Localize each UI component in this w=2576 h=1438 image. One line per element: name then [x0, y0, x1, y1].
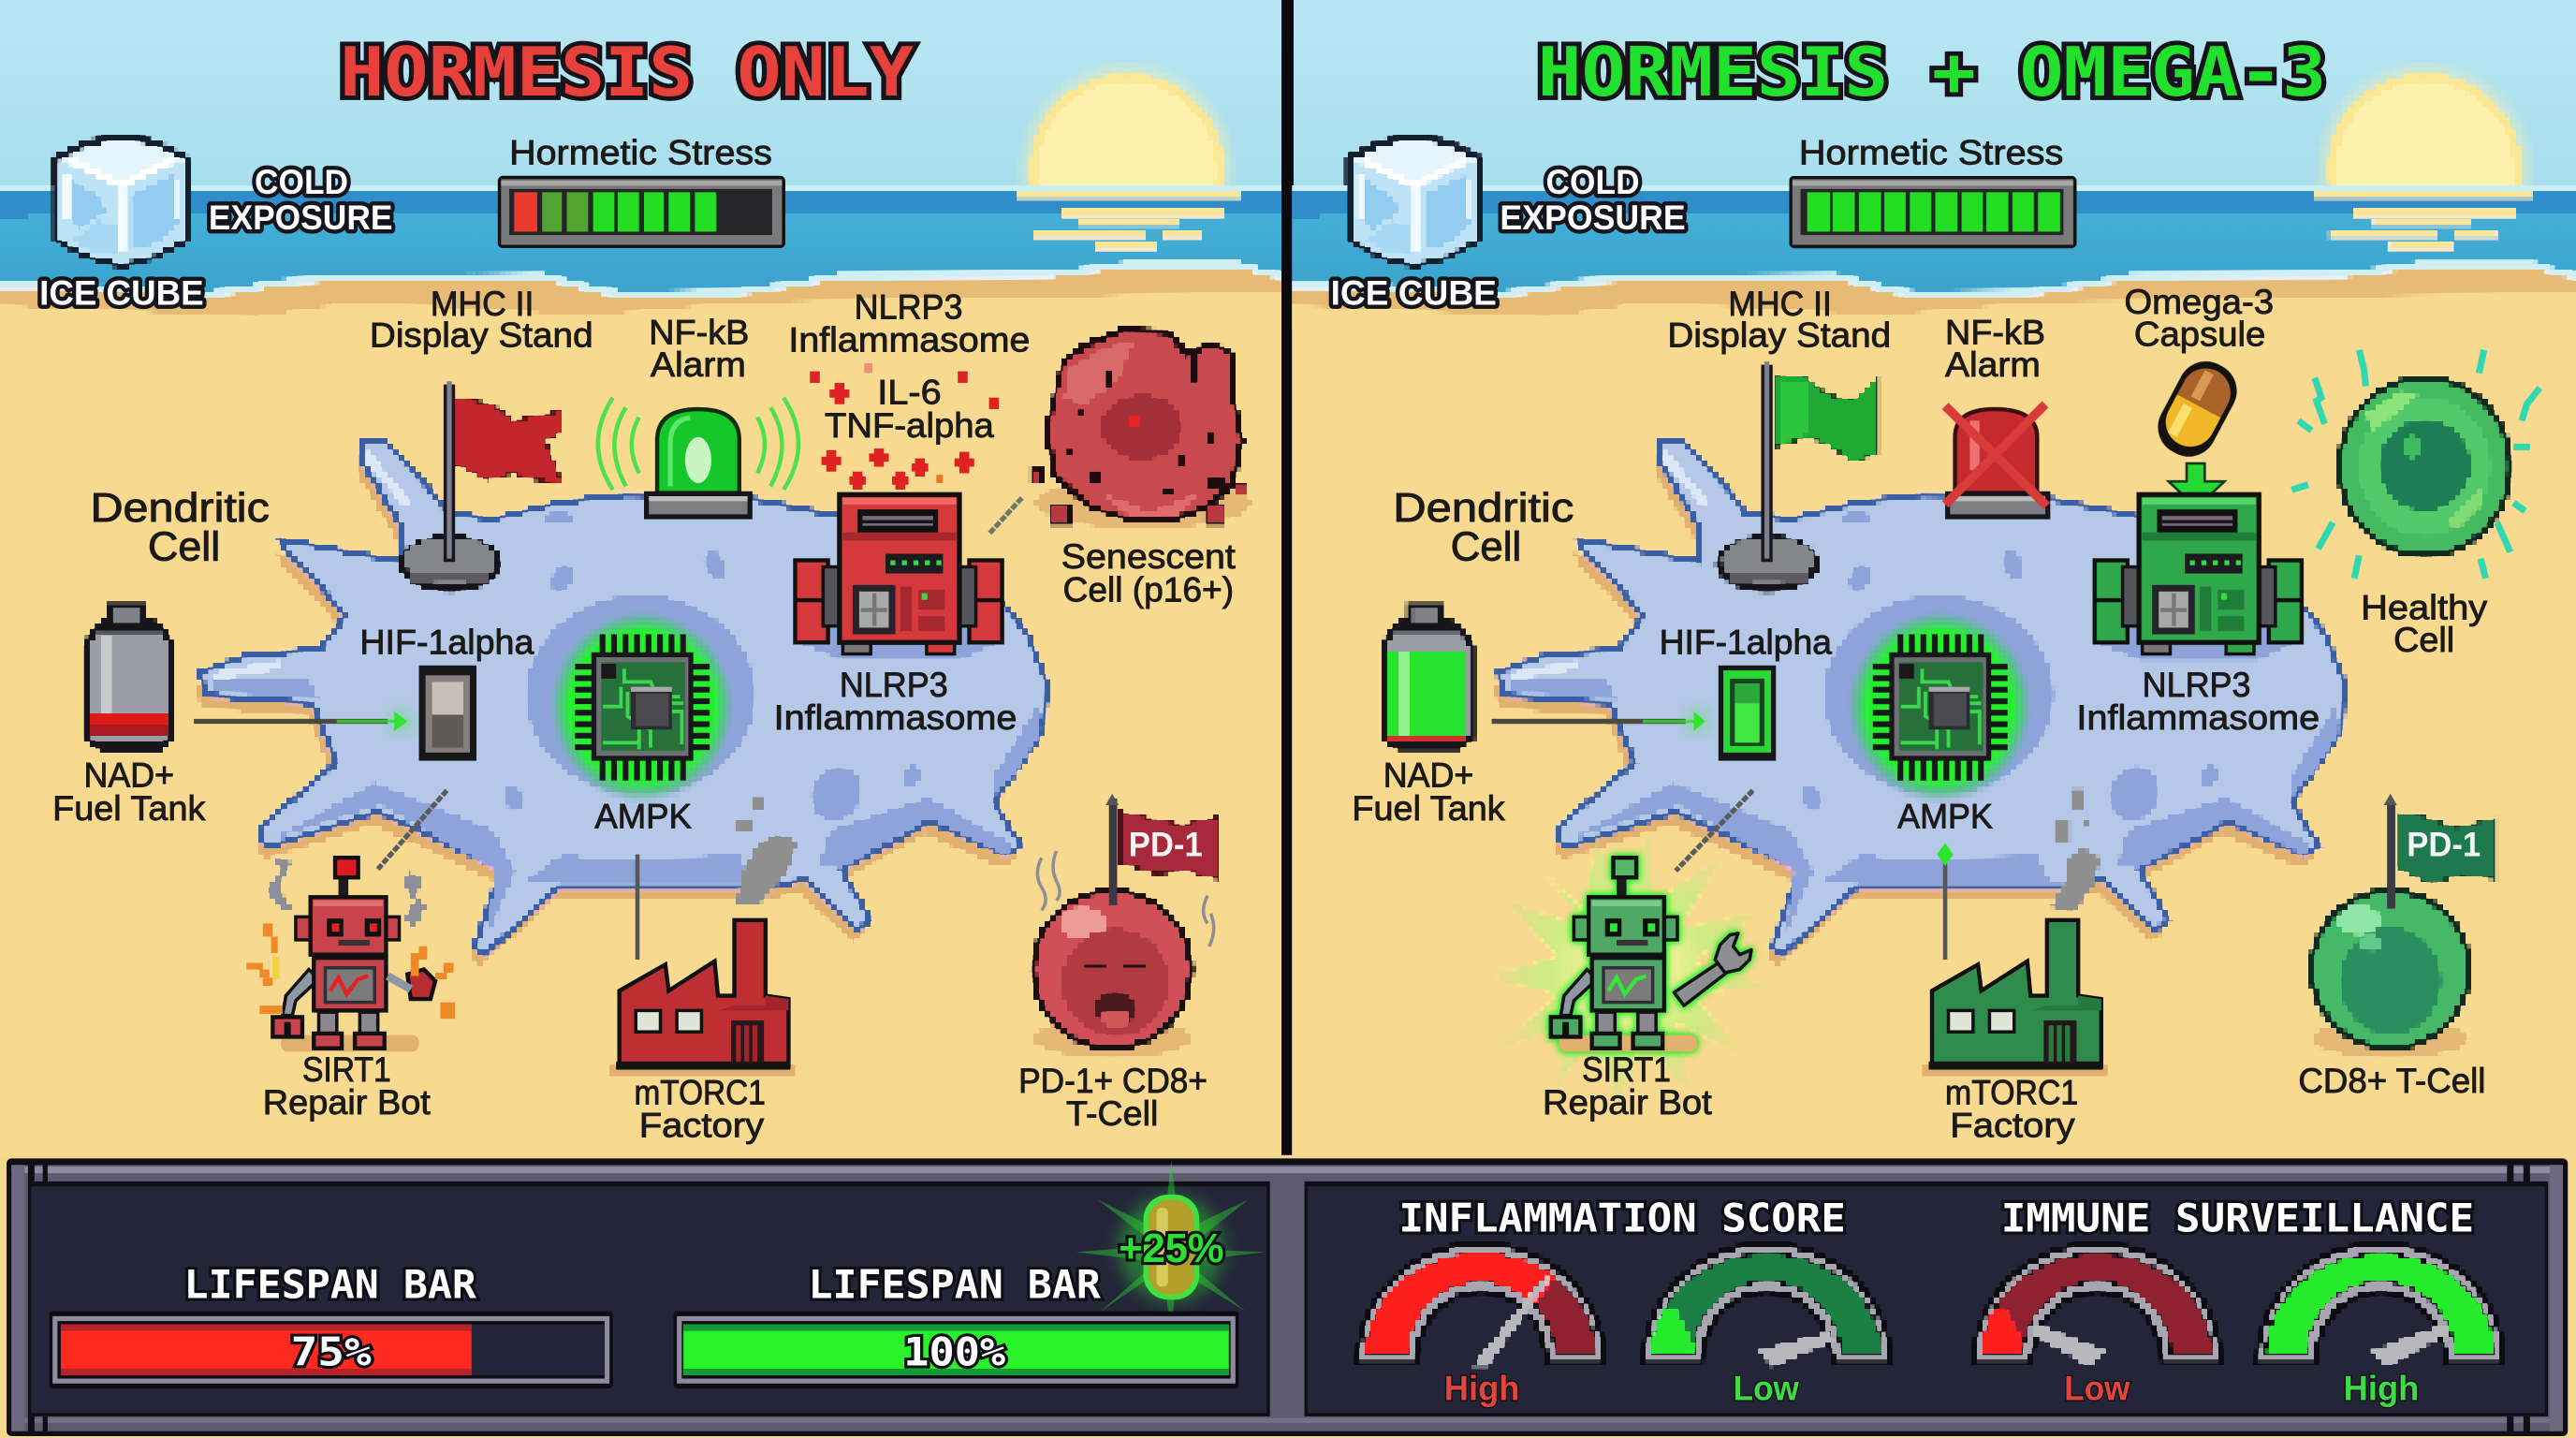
icon: smoke right — [2050, 788, 2101, 914]
icon: cytokine particles — [810, 363, 999, 490]
icon: NAD+ fuel tank full — [1380, 603, 1475, 751]
label: dendritic cell: Cell — [148, 523, 220, 569]
scene: beach and sea right — [1294, 185, 2576, 1157]
label: AMPK: AMPK — [594, 798, 692, 836]
label: NLRP3 inflammasome top: Inflammasome — [788, 321, 1030, 360]
label: lifespan bar left: LIFESPAN BAR — [184, 1262, 477, 1308]
label: immune surveillance: IMMUNE SURVEILLANCE — [2001, 1195, 2474, 1240]
label: NF-kB right: NF-kB — [1945, 314, 2045, 352]
label: NAD+ right: NAD+ — [1383, 756, 1473, 795]
label: ice cube right: ICE CUBE — [1331, 274, 1497, 313]
bar: lifespan 100 percent — [674, 1312, 1238, 1388]
label: healthy cell: Cell — [2393, 621, 2454, 659]
icon: pd-1 flag left — [1120, 812, 1218, 879]
icon: SIRT1 robot green with wrench — [1551, 858, 1751, 1051]
icon: NAD+ fuel tank low — [82, 603, 176, 751]
icon: ice cube — [52, 133, 191, 270]
icon: pd-1 pole left — [1105, 794, 1119, 905]
label: NLRP3 right: NLRP3 — [2143, 666, 2250, 704]
scene: beach and sea — [0, 185, 1283, 1157]
icon: AMPK chip right — [1873, 634, 2008, 781]
label: IL-6 TNF-alpha — [825, 374, 994, 445]
label: NLRP3 inflammasome top: NLRP3 — [855, 287, 962, 326]
label: gauge low red: Low — [2064, 1369, 2130, 1407]
icon: AMPK chip — [575, 634, 710, 781]
label: 100 percent: 100% — [903, 1328, 1006, 1374]
label: MHC II right: Display Stand — [1667, 315, 1891, 354]
label: mTORC1 right: mTORC1 — [1945, 1073, 2078, 1111]
diagram: dendritic cell body right — [1493, 440, 2345, 968]
label: NAD+ fuel tank: Fuel Tank — [52, 789, 206, 828]
icon: AMPK glow right — [1845, 608, 2036, 805]
label: MHC II display stand — [370, 285, 593, 354]
label: mTORC1 factory: mTORC1 — [634, 1073, 766, 1111]
icon: healthy cell — [2336, 374, 2513, 559]
icon: plus 25 percent capsule — [1076, 1160, 1265, 1339]
label: cold exposure — [209, 163, 392, 237]
label: cold exposure right: EXPOSURE — [1500, 198, 1686, 237]
gauge: surveillance high — [2258, 1244, 2504, 1364]
icon: omega-3 capsule — [2148, 351, 2247, 466]
connector lines left — [194, 498, 1022, 960]
icon: NLRP3 inflammasome machine green — [2095, 494, 2302, 654]
label: IL-6 TNF-alpha: IL-6 — [877, 374, 942, 412]
label: senescent cell: Cell (p16+) — [1063, 570, 1234, 609]
gauge: inflammation high — [1358, 1244, 1604, 1364]
label: omega-3 capsule: Omega-3 — [2124, 283, 2274, 321]
diagram: dendritic cell body — [196, 440, 1046, 968]
label: PD-1 flag text: PD-1 — [1129, 825, 1203, 863]
label: dendritic cell right: Dendritic — [1393, 485, 1573, 531]
icon: NF-kB alarm active — [598, 398, 798, 520]
icon: SIRT1 robot red — [246, 858, 455, 1051]
icon: exhausted T-cell — [1030, 888, 1194, 1058]
label: NLRP3 inflammasome top — [788, 287, 1030, 360]
label: plus 25 percent: +25% — [1119, 1225, 1224, 1271]
label: NLRP3 inflammasome: Inflammasome — [774, 698, 1017, 737]
heading: hormesis only: HORMESIS ONLY — [340, 33, 915, 111]
label: SIRT1 repair bot: SIRT1 — [302, 1050, 391, 1089]
icon: fatigue lines — [1037, 851, 1214, 946]
label: CD8+ T-cell: CD8+ T-Cell — [2298, 1062, 2485, 1100]
label: MHC II right: MHC II — [1728, 285, 1832, 323]
label: NLRP3 right: Inflammasome — [2076, 698, 2320, 737]
label: mTORC1 right — [1945, 1073, 2078, 1145]
icon: flag pole left — [444, 381, 455, 562]
label: healthy cell: Healthy — [2361, 589, 2488, 627]
label: senescent cell — [1061, 537, 1236, 609]
icon: NF-kB alarm disabled — [1945, 407, 2050, 520]
label: SIRT1 repair bot — [263, 1050, 431, 1122]
icon: flag pole right — [1761, 361, 1773, 562]
label: NAD+ right: Fuel Tank — [1352, 789, 1505, 828]
divider between panels — [1281, 0, 1294, 1157]
icon: red flag on MHC II stand — [398, 398, 562, 594]
gauge: surveillance low — [1974, 1244, 2220, 1364]
label: MHC II right — [1667, 285, 1891, 354]
label: cold exposure: EXPOSURE — [209, 198, 392, 237]
icon: green flag on MHC II stand — [1715, 374, 1878, 594]
label: dendritic cell right: Cell — [1451, 523, 1521, 569]
label: MHC II display stand: MHC II — [431, 285, 534, 323]
label: SIRT1 right — [1543, 1050, 1712, 1122]
label: gauge low green: Low — [1734, 1369, 1799, 1407]
label: PD-1+ CD8+ T-cell: PD-1+ CD8+ — [1018, 1062, 1208, 1100]
label: HIF-1alpha right: HIF-1alpha — [1660, 624, 1832, 662]
label: SIRT1 right: Repair Bot — [1543, 1083, 1712, 1122]
label: HIF-1alpha: HIF-1alpha — [359, 624, 534, 662]
label: mTORC1 right: Factory — [1950, 1107, 2075, 1145]
label: PD-1+ CD8+ T-cell — [1018, 1062, 1208, 1133]
label: NLRP3 right — [2076, 666, 2320, 737]
icon: mTORC1 factory red — [609, 920, 795, 1077]
label: mTORC1 factory: Factory — [639, 1107, 765, 1145]
label: gauge high green: High — [2344, 1369, 2419, 1407]
label: gauge high red: High — [1444, 1369, 1519, 1407]
icon: HIF-1alpha switch on — [1719, 666, 1776, 761]
label: cold exposure right: COLD — [1546, 163, 1640, 201]
label: omega-3 capsule: Capsule — [2134, 315, 2265, 353]
label: AMPK right: AMPK — [1897, 798, 1993, 836]
label: NF-kB right — [1945, 314, 2045, 384]
label: NF-kB right: Alarm — [1945, 345, 2041, 384]
label: IL-6 TNF-alpha: TNF-alpha — [825, 406, 994, 445]
label: hormetic stress: Hormetic Stress — [509, 134, 772, 172]
label: omega-3 capsule — [2124, 283, 2274, 353]
label: NAD+ fuel tank — [52, 756, 206, 828]
label: NAD+ fuel tank: NAD+ — [84, 756, 174, 795]
icon: healthy CD8 T-cell — [2308, 888, 2472, 1058]
gauges artwork — [1358, 1244, 2504, 1367]
icon: mTORC1 factory green — [1922, 920, 2108, 1077]
label: NF-kB alarm: NF-kB — [649, 314, 749, 352]
icon: AMPK glow — [547, 608, 738, 805]
icon: green down arrow — [2169, 463, 2224, 507]
panel: dashboard — [0, 1155, 2576, 1438]
heading: hormesis plus omega-3: HORMESIS + OMEGA-3 — [1538, 33, 2326, 111]
icon: smoke left — [736, 795, 798, 905]
label: SIRT1 repair bot: Repair Bot — [263, 1083, 431, 1122]
label: dendritic cell: Dendritic — [91, 485, 270, 531]
icon: HIF-1alpha switch off — [419, 666, 476, 761]
icon: robot glow rays — [1486, 829, 1771, 1104]
panel: hormesis only — [0, 0, 1283, 1157]
icon: healthy cell sparks — [2291, 350, 2539, 579]
label: NLRP3 inflammasome: NLRP3 — [840, 666, 948, 704]
panel: lifespan section — [28, 1160, 1270, 1416]
icon: ice cube right — [1345, 133, 1484, 270]
label: dendritic cell — [91, 485, 270, 569]
icon: NLRP3 inflammasome machine red — [795, 494, 1003, 654]
label: PD-1+ CD8+ T-cell: T-Cell — [1066, 1094, 1158, 1133]
label: mTORC1 factory — [634, 1073, 766, 1145]
icon: senescent cell — [1032, 327, 1251, 529]
label: 75 percent: 75% — [291, 1328, 372, 1374]
gauge needles — [1472, 1277, 2452, 1367]
icon: stress meter right — [1789, 176, 2076, 248]
label: NLRP3 inflammasome — [774, 666, 1017, 737]
bar: lifespan 75 percent — [50, 1312, 613, 1388]
label: ice cube: ICE CUBE — [39, 274, 204, 313]
icon: pd-1 pole right — [2384, 794, 2397, 909]
label: NF-kB alarm: Alarm — [651, 345, 746, 384]
label: inflammation score: INFLAMMATION SCORE — [1398, 1195, 1846, 1240]
icon: pd-1 flag right — [2397, 814, 2496, 884]
label: senescent cell: Senescent — [1061, 537, 1236, 576]
label: healthy cell — [2361, 589, 2488, 659]
label: PD-1 flag text right: PD-1 — [2407, 825, 2481, 863]
label: hormetic stress right: Hormetic Stress — [1799, 134, 2063, 172]
label: NAD+ right — [1352, 756, 1505, 828]
label: MHC II display stand: Display Stand — [370, 315, 593, 354]
label: lifespan bar right: LIFESPAN BAR — [809, 1262, 1102, 1308]
label: cold exposure right — [1500, 163, 1686, 237]
icon: stress meter left — [498, 176, 785, 248]
label: NF-kB alarm — [649, 314, 749, 384]
label: SIRT1 right: SIRT1 — [1582, 1050, 1671, 1089]
label: cold exposure: COLD — [255, 163, 348, 201]
panel: hormesis plus omega-3 — [1294, 0, 2576, 1157]
connector lines right — [1492, 710, 1954, 960]
gauge: inflammation low — [1644, 1244, 1890, 1364]
panel: gauges section — [1305, 1181, 2548, 1416]
label: dendritic cell right — [1393, 485, 1573, 569]
